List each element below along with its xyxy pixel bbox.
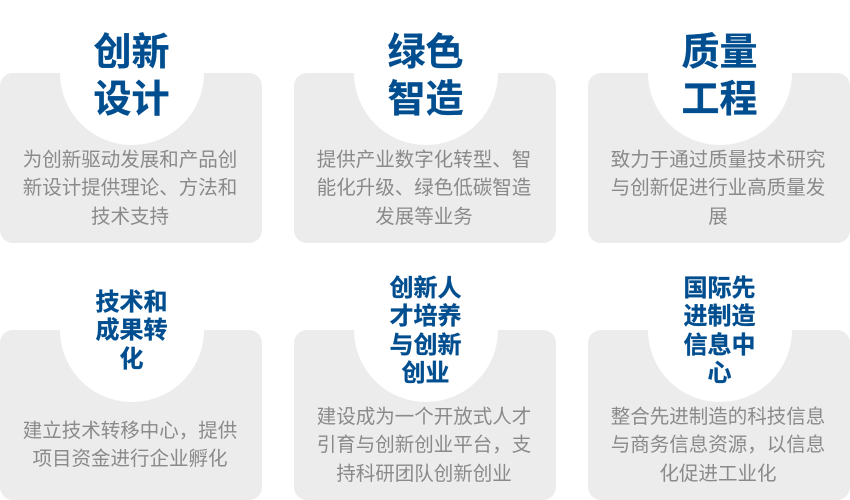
heading: 绿色智造 — [387, 32, 464, 120]
text: 国际先进制造信息中心 description — [611, 406, 825, 484]
text: 质量工程 description: 展 — [708, 206, 728, 228]
heading: 国际先进制造信息中心: 国际先 — [684, 274, 756, 302]
heading: 质量工程: 工程 — [681, 78, 758, 120]
heading: 绿色智造: 智造 — [387, 78, 464, 120]
text: 技术和成果转化 description: 项目资金进行企业孵化 — [32, 448, 228, 470]
text: 创新设计 description — [23, 148, 237, 228]
text: 技术和成果转化 description: 建立技术转移中心，提供 — [23, 420, 237, 442]
text: 质量工程 description: 致力于通过质量技术研究 — [611, 148, 825, 170]
heading: 创新人才培养与创新创业: 创业 — [402, 360, 450, 387]
heading: 绿色智造: 绿色 — [387, 32, 464, 74]
text: 质量工程 description — [611, 148, 825, 228]
heading: 创新人才培养与创新创业: 与创新 — [390, 332, 462, 359]
text: 技术和成果转化 description — [23, 420, 237, 470]
heading: 质量工程: 质量 — [681, 32, 758, 74]
heading: 质量工程 — [681, 32, 758, 120]
panel: 质量工程 — [588, 32, 850, 243]
text: 创新人才培养与创新创业 description: 引育与创新创业平台，支 — [317, 434, 531, 456]
text: 创新设计 description: 新设计提供理论、方法和 — [23, 177, 237, 199]
panel: 创新人才培养与创新创业 — [294, 274, 556, 500]
panel: 国际先进制造信息中心 — [588, 274, 850, 500]
heading: 创新人才培养与创新创业: 创新人 — [390, 274, 462, 302]
text: 创新设计 description: 技术支持 — [91, 206, 169, 228]
text: 创新设计 description: 为创新驱动发展和产品创 — [23, 148, 237, 170]
heading: 技术和成果转化: 化 — [120, 346, 144, 373]
heading: 创新人才培养与创新创业 — [390, 274, 462, 387]
heading: 国际先进制造信息中心: 信息中 — [684, 332, 756, 359]
text: 创新人才培养与创新创业 description — [317, 406, 531, 484]
text: 创新人才培养与创新创业 description: 建设成为一个开放式人才 — [317, 406, 531, 428]
panel: 绿色智造 — [294, 32, 556, 243]
panel: 创新设计 — [0, 32, 262, 243]
text: 国际先进制造信息中心 description: 与商务信息资源，以信息 — [611, 434, 825, 456]
text: 绿色智造 description: 提供产业数字化转型、智 — [317, 148, 531, 170]
heading: 创新设计: 创新 — [93, 32, 170, 74]
text: 质量工程 description: 与创新促进行业高质量发 — [611, 177, 825, 199]
heading: 技术和成果转化 — [96, 288, 168, 373]
text: 绿色智造 description: 发展等业务 — [375, 206, 473, 228]
heading: 技术和成果转化: 技术和 — [96, 288, 168, 316]
heading: 创新人才培养与创新创业: 才培养 — [390, 303, 462, 330]
heading: 技术和成果转化: 成果转 — [96, 317, 168, 344]
text: 绿色智造 description: 能化升级、绿色低碳智造 — [317, 177, 531, 199]
heading: 国际先进制造信息中心: 心 — [708, 360, 732, 387]
text: 国际先进制造信息中心 description: 化促进工业化 — [659, 462, 776, 484]
text: 绿色智造 description — [317, 148, 531, 228]
heading: 国际先进制造信息中心 — [684, 274, 756, 387]
heading: 创新设计 — [93, 32, 170, 120]
heading: 国际先进制造信息中心: 进制造 — [684, 303, 756, 330]
text: 创新人才培养与创新创业 description: 持科研团队创新创业 — [336, 462, 512, 484]
heading: 创新设计: 设计 — [93, 78, 170, 120]
text: 国际先进制造信息中心 description: 整合先进制造的科技信息 — [611, 406, 825, 428]
panel: 技术和成果转化 — [0, 288, 262, 500]
